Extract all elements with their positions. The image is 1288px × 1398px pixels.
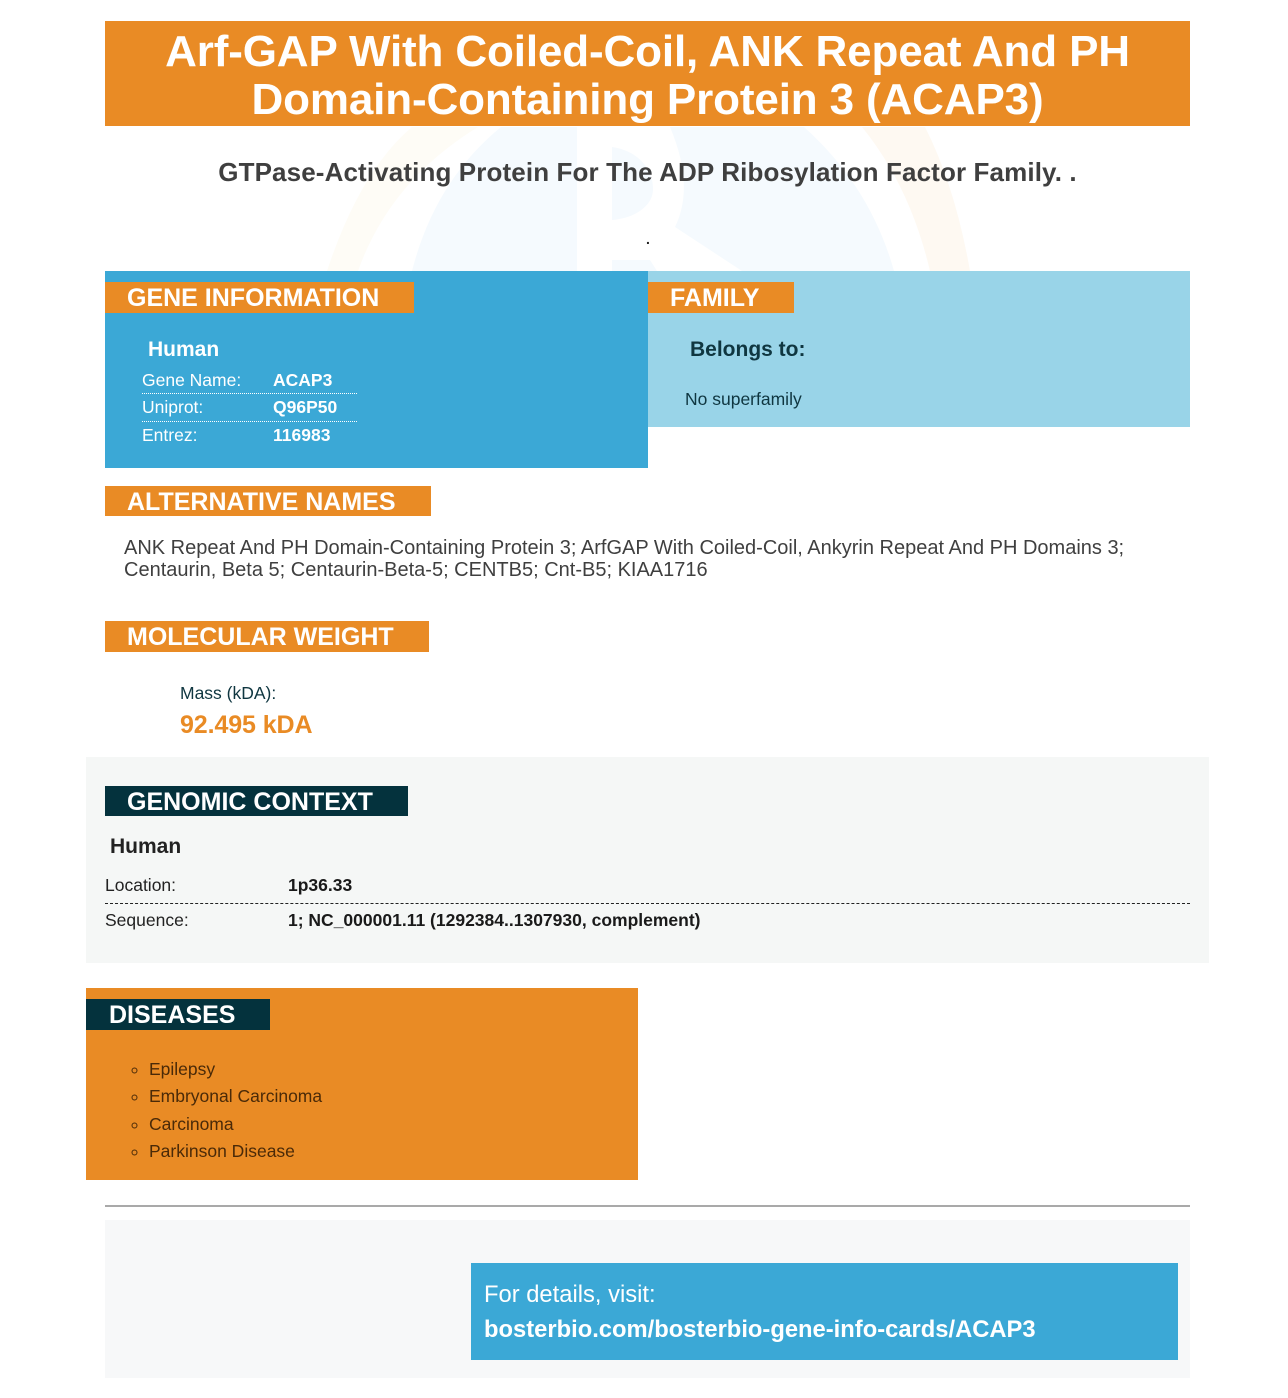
belongs to label: Belongs to: [690, 338, 806, 361]
disease list [132, 1059, 322, 1161]
location row: 1p36.33 [288, 875, 352, 895]
panel: footer [105, 1220, 1190, 1378]
footer divider [105, 1205, 1190, 1207]
disease list: Embryonal Carcinoma [149, 1086, 322, 1106]
sequence row: Sequence: [105, 910, 189, 930]
heading: family [648, 282, 794, 313]
panel: diseases [86, 988, 638, 1180]
gene name row: ACAP3 [273, 370, 332, 390]
callout: details link: bosterbio.com/bosterbio-gene-info-cards/ACAP3 [484, 1316, 1036, 1343]
heading: family: FAMILY [670, 284, 759, 312]
panel: genomic context [86, 757, 1209, 963]
uniprot row: Uniprot: [142, 397, 203, 417]
location row [105, 868, 1190, 904]
alternative names text [124, 537, 1124, 581]
heading: gene information: GENE INFORMATION [127, 284, 379, 312]
entrez row: Entrez: [142, 425, 197, 445]
disease list: Parkinson Disease [149, 1141, 295, 1161]
disease list: Epilepsy [149, 1059, 215, 1079]
location row: Location: [105, 875, 176, 895]
sequence row [105, 910, 700, 930]
dot text: . [646, 231, 650, 247]
gene name row [142, 366, 357, 394]
subtitle: GTPase-Activating Protein For The ADP Ribosylation Factor Family. . [218, 157, 1077, 187]
alternative names text: Centaurin, Beta 5; Centaurin-Beta-5; CENTB5; Cnt-B5; KIAA1716 [124, 559, 708, 581]
disease list: Carcinoma [149, 1114, 234, 1134]
entrez row: 116983 [273, 425, 330, 445]
watermark logo [328, 127, 970, 271]
gene name row: Gene Name: [142, 370, 241, 390]
mass label: Mass (kDA): [180, 683, 276, 703]
panel: family [648, 271, 1190, 427]
uniprot row: Q96P50 [273, 397, 337, 417]
title banner: Domain-Containing Protein 3 (ACAP3) [252, 75, 1044, 124]
mass value: 92.495 kDA [180, 711, 312, 739]
heading: molecular weight: MOLECULAR WEIGHT [127, 623, 394, 651]
species label: Human [148, 338, 219, 361]
panel: gene information [105, 271, 648, 468]
heading: diseases [86, 999, 270, 1030]
uniprot row [142, 394, 357, 422]
heading: genomic context: GENOMIC CONTEXT [127, 788, 373, 816]
callout: details link: For details, visit: [484, 1281, 656, 1308]
heading: alternative names: ALTERNATIVE NAMES [127, 488, 396, 516]
title banner [105, 21, 1190, 126]
alternative names text: ANK Repeat And PH Domain-Containing Protein 3; ArfGAP With Coiled-Coil, Ankyrin Repeat And PH Domains 3; [124, 537, 1124, 559]
title banner: Arf-GAP With Coiled-Coil, ANK Repeat And PH [165, 27, 1130, 76]
callout: details link [471, 1263, 1178, 1360]
superfamily text: No superfamily [685, 389, 802, 409]
heading: diseases: DISEASES [109, 1001, 235, 1029]
entrez row [142, 425, 330, 445]
species label: Human [110, 835, 181, 858]
sequence row: 1; NC_000001.11 (1292384..1307930, complement) [288, 910, 700, 930]
